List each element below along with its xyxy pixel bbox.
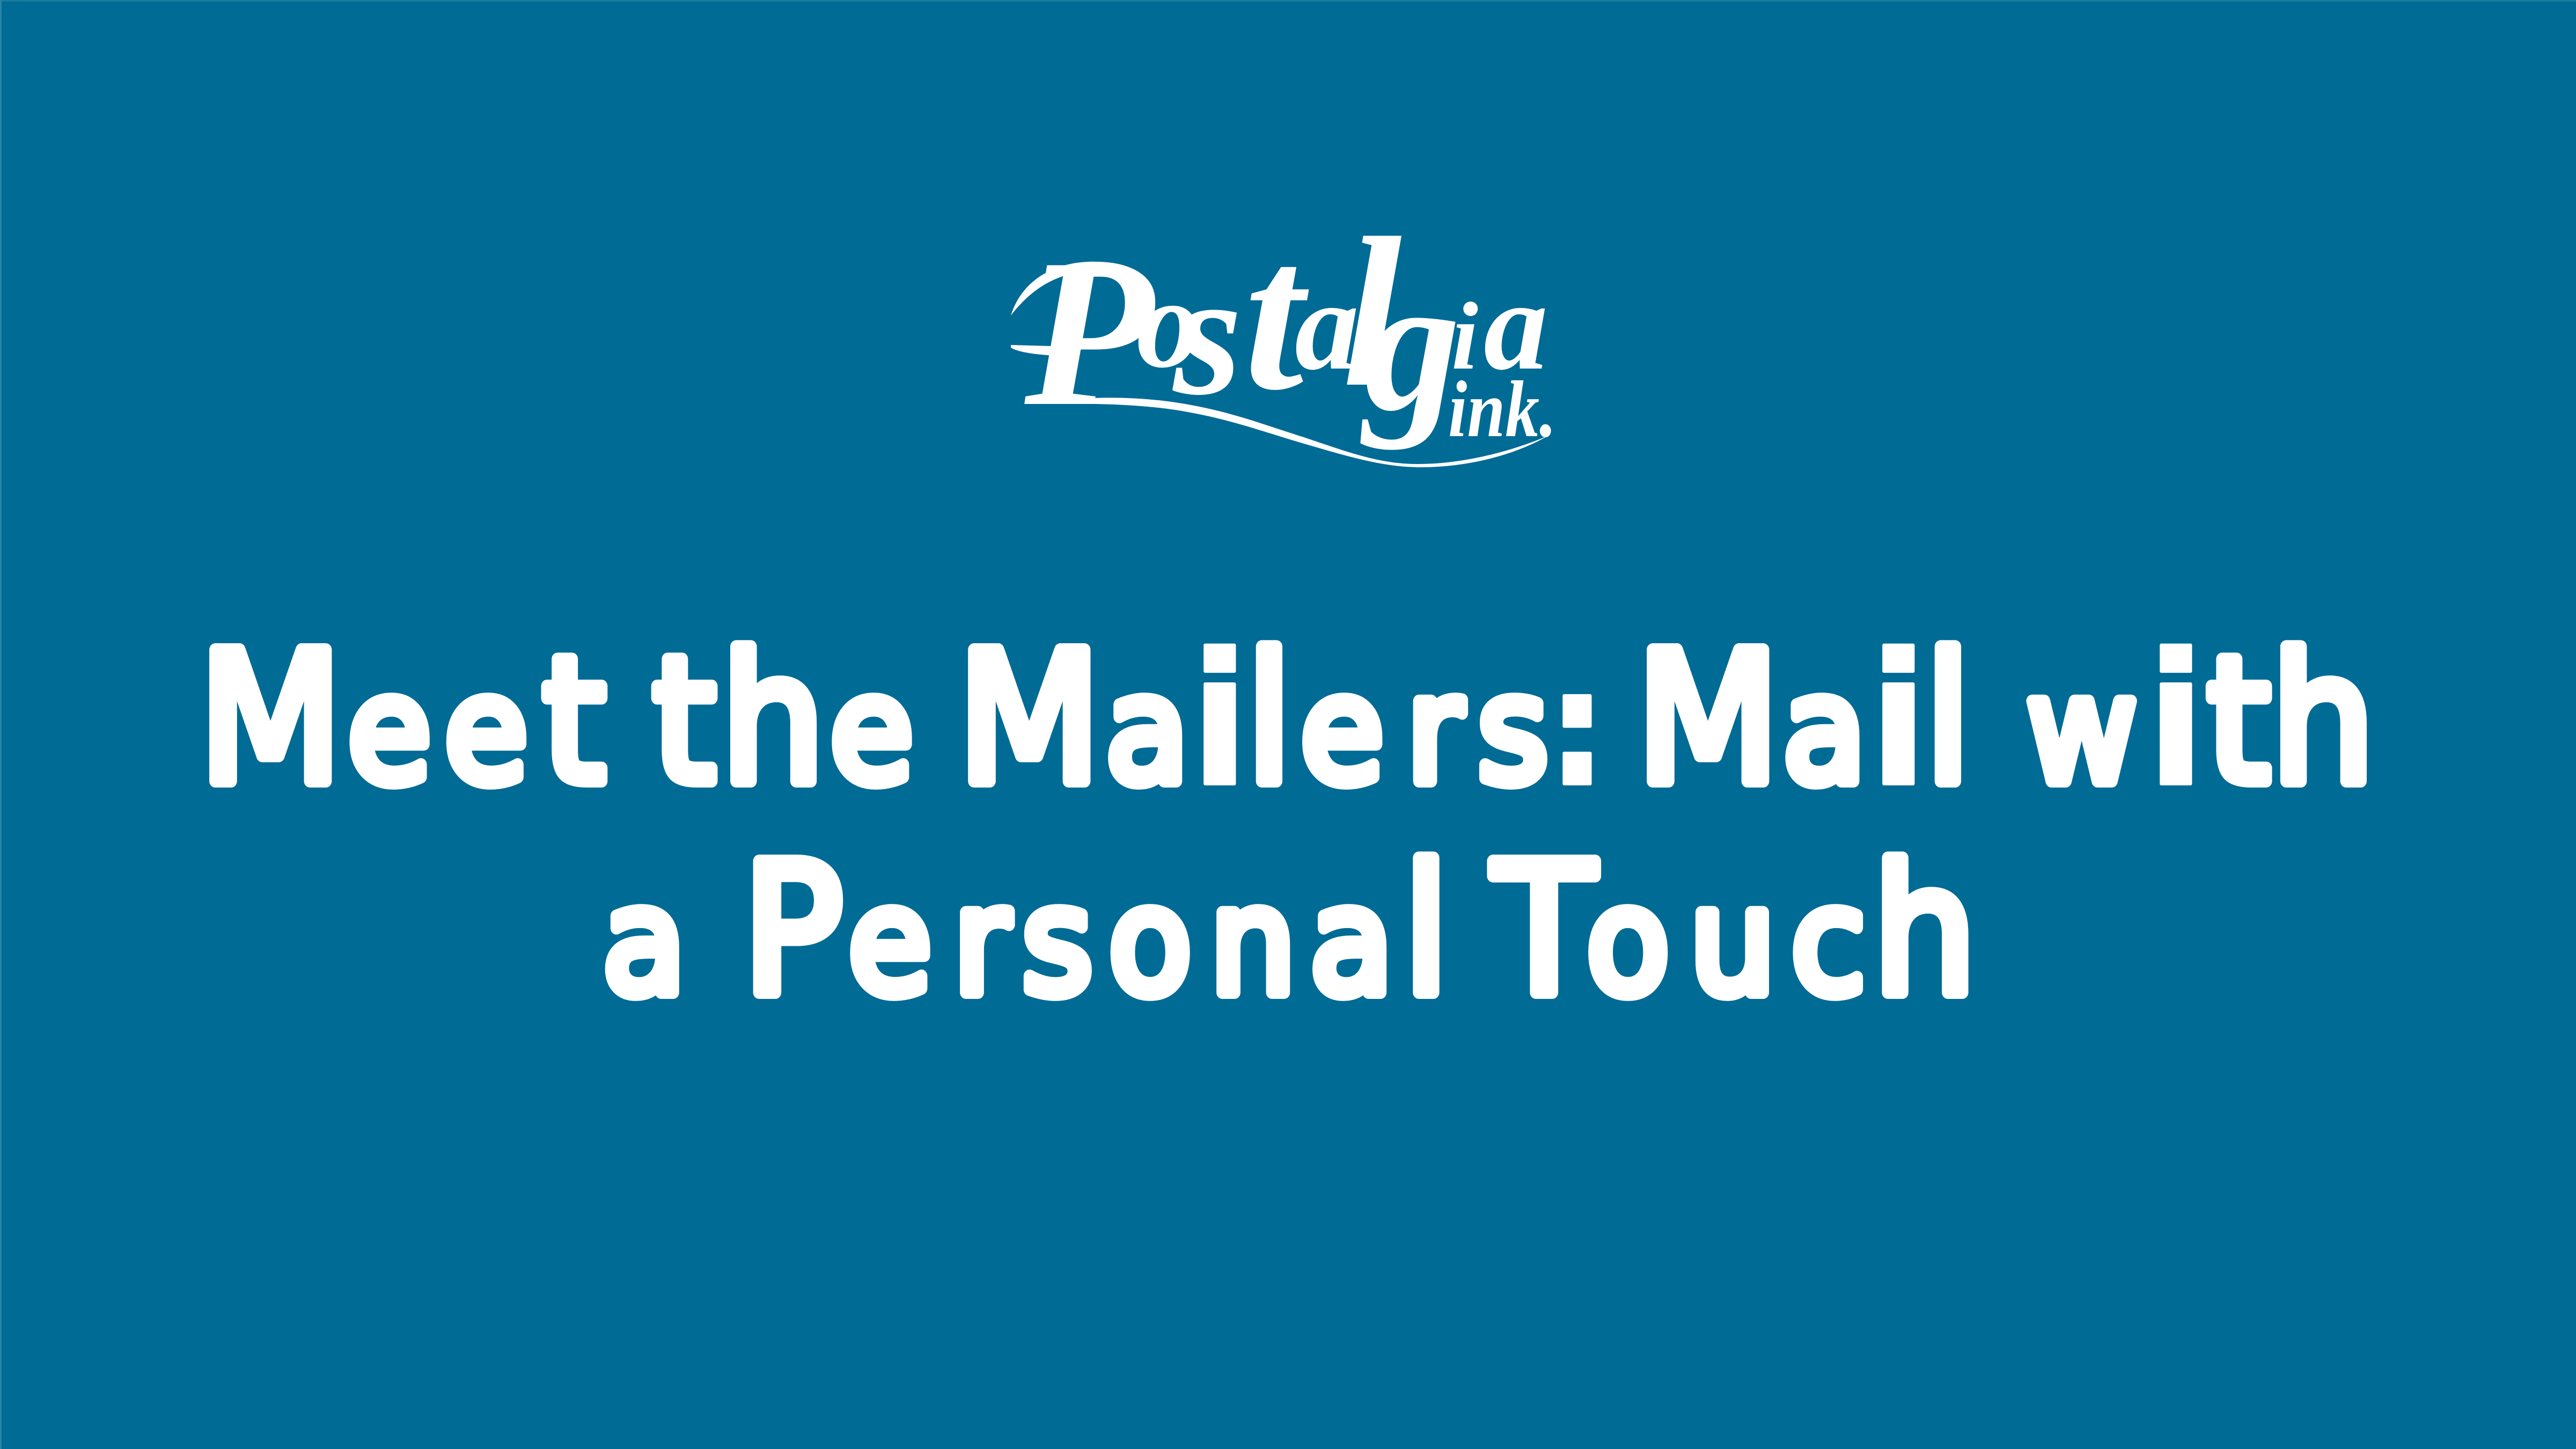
logo wordmark: Postalgia: a xyxy=(1295,254,1359,396)
logo wordmark: Postalgia: t xyxy=(1244,197,1311,435)
title line 2: o xyxy=(1587,857,1669,1027)
title line 1: l xyxy=(1925,617,1970,823)
title line 1: i xyxy=(1870,615,1927,827)
logo wordmark: ink: ink. xyxy=(1448,365,1557,454)
title line 1: M xyxy=(199,614,342,824)
title line 1: i xyxy=(1191,615,1249,827)
title line 1: s xyxy=(1478,645,1548,816)
title line 1: e xyxy=(445,645,527,816)
logo wordmark: Postalgia: l xyxy=(1342,194,1403,431)
title xyxy=(199,614,2375,1035)
title line 2: o xyxy=(1109,857,1191,1027)
logo flourish on P xyxy=(1011,262,1155,315)
title line 2: T xyxy=(1491,826,1597,1035)
title line 2: P xyxy=(743,826,843,1035)
logo wordmark: Postalgia: P xyxy=(1021,216,1157,450)
title line 2: h xyxy=(1873,828,1976,1034)
title line 1: t xyxy=(653,620,716,822)
logo wordmark: Postalgia: g xyxy=(1358,237,1461,451)
title line 2: l xyxy=(1404,828,1449,1034)
title line 1: t xyxy=(2207,620,2270,822)
title line 1: a xyxy=(1106,645,1188,816)
title line 2: a xyxy=(1310,857,1393,1027)
title line 1: e xyxy=(830,645,913,816)
logo: Postalgia ink xyxy=(1011,194,1557,467)
title line 1: M xyxy=(958,614,1101,824)
logo wordmark: Postalgia: s xyxy=(1171,236,1242,432)
title line 1: M xyxy=(1636,614,1780,824)
logo underline swoosh xyxy=(1046,398,1548,467)
title line 2: c xyxy=(1792,857,1866,1027)
logo wordmark: Postalgia: a xyxy=(1484,254,1548,396)
title line 2: s xyxy=(1022,857,1092,1027)
logo wordmark: Postalgia: o xyxy=(1136,252,1201,394)
logo wordmark: Postalgia: i xyxy=(1451,283,1478,389)
title line 2: a xyxy=(603,857,686,1027)
title line 1: h xyxy=(2271,617,2375,823)
title line 1: : xyxy=(1547,634,1607,822)
title line 1: i xyxy=(2147,615,2205,827)
title line 1: e xyxy=(348,645,431,816)
title line 2: r xyxy=(953,857,1010,1027)
title line 1: e xyxy=(1301,645,1384,816)
logo crossbar flourish xyxy=(1011,345,1068,356)
title line 1: r xyxy=(1407,645,1464,816)
title line 1: l xyxy=(1246,617,1291,823)
title line 1: t xyxy=(543,620,605,822)
title line 2: n xyxy=(1210,857,1296,1027)
title line 2: e xyxy=(848,857,931,1027)
title line 2: u xyxy=(1690,857,1775,1027)
title line 1: h xyxy=(722,617,825,823)
title line 1: w xyxy=(2027,645,2137,816)
title line 1: a xyxy=(1783,645,1866,816)
